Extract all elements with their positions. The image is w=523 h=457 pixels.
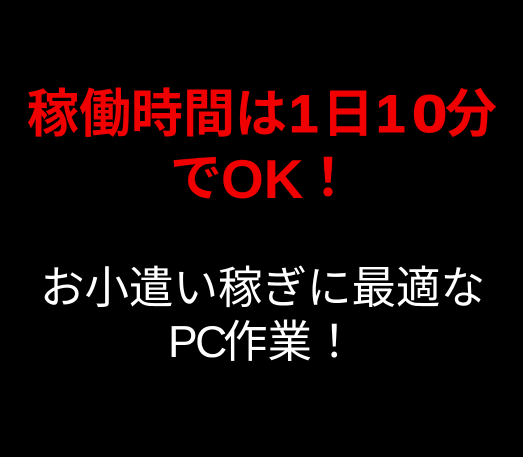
subheading line 2: PC work: ！ bbox=[312, 318, 357, 367]
heading line 2: OK: ！ bbox=[302, 150, 354, 208]
subheading line 2: PC work: PC bbox=[168, 318, 225, 367]
heading line 1: working time: 日 bbox=[322, 86, 374, 144]
heading line 1: working time: 分 bbox=[445, 86, 497, 144]
subheading line 2: PC work: 作業 bbox=[223, 318, 312, 367]
heading line 2: OK: で bbox=[170, 150, 222, 208]
heading line 1: working time bbox=[27, 85, 497, 144]
heading line 1: working time: 稼働時間は bbox=[27, 86, 287, 144]
subheading line 1: pocket money: お小遣い稼ぎに最適な bbox=[40, 264, 485, 313]
subheading line 2: PC work bbox=[168, 318, 357, 367]
heading line 1: working time: 1 bbox=[289, 85, 318, 144]
heading line 1: working time: 0 bbox=[412, 85, 447, 144]
heading line 2: OK bbox=[170, 148, 354, 210]
heading line 1: working time: 1 bbox=[376, 85, 405, 144]
heading line 2: OK: OK bbox=[221, 148, 304, 210]
